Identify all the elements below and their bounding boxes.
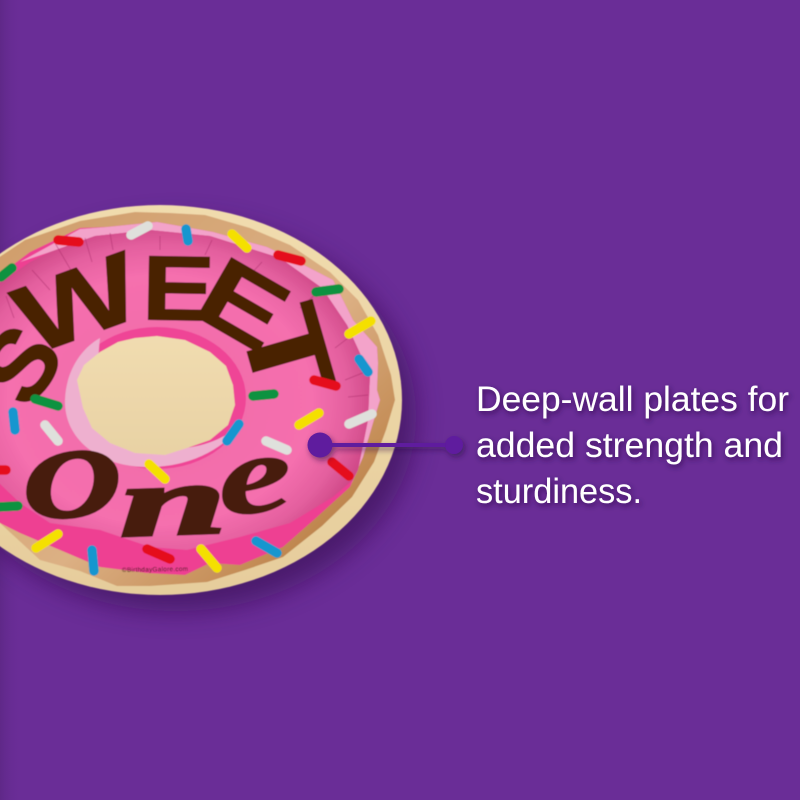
word: SWEET: E [179,235,307,373]
word: SWEET: E [141,236,216,341]
callout text: Deep-wall plates for [476,380,789,419]
pale icing highlight [20,222,380,487]
word: One: n [118,445,228,557]
plate shadow [0,221,416,611]
copyright text: ©BirthdayGalore.com [122,565,188,574]
pink icing [0,222,380,575]
plate rim [0,205,402,595]
callout text: sturdiness. [476,472,642,511]
word: One [20,409,298,557]
pleat fold lines [6,233,368,397]
paper plate with donut design [0,205,416,611]
center hole pink ring [68,327,246,469]
word: One: e [211,409,298,540]
word: SWEET: T [215,291,360,411]
callout connector with dots [308,432,463,458]
callout text: added strength and [476,426,783,465]
center hole [77,336,235,455]
word: SWEET [0,231,360,424]
word: SWEET: W [0,231,155,376]
center hole pale ring [65,338,240,467]
sprinkles [0,226,372,571]
inner pink surface [0,230,370,550]
word: One: O [20,428,124,541]
donut crust [0,212,395,586]
callout text [476,380,789,511]
